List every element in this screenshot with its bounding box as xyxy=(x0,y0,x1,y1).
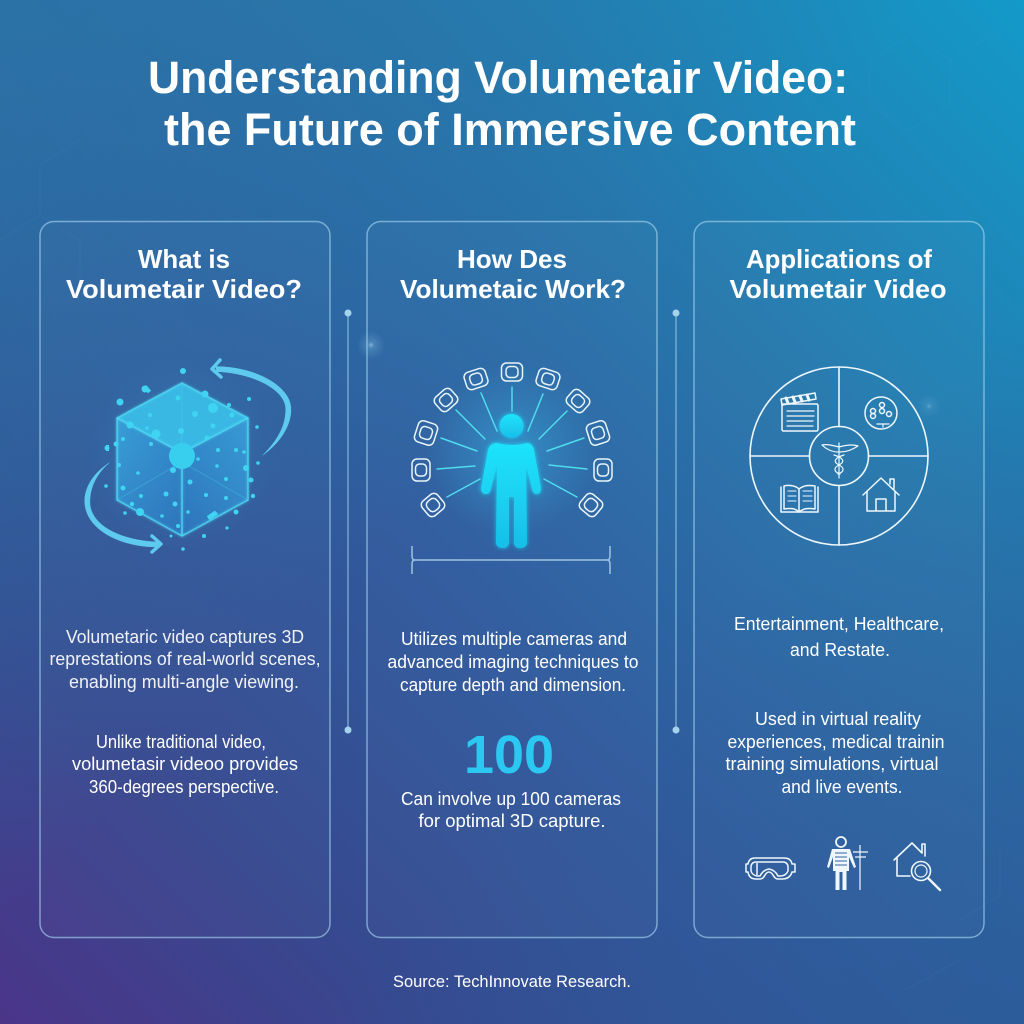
icon: vr headset xyxy=(746,858,795,879)
heading: what is xyxy=(66,244,302,304)
cameras xyxy=(412,363,612,519)
text: uses xyxy=(726,709,944,797)
figure xyxy=(481,414,541,548)
text: how it works: Utilizes multiple cameras and xyxy=(401,629,627,649)
text: how it works: advanced imaging techniques to xyxy=(388,652,638,672)
entertainment group xyxy=(865,397,897,429)
text: comparison: 360-degrees perspective. xyxy=(89,777,279,797)
connector: right xyxy=(672,310,680,734)
arrow: lower rotation arc xyxy=(85,463,161,552)
text: stat caption xyxy=(401,789,621,831)
panel: applications xyxy=(694,222,984,938)
text: definition: represtations of real-world scenes, xyxy=(50,649,320,669)
icon: house with magnifier xyxy=(894,843,940,890)
text: how it works xyxy=(388,629,638,695)
icon: rotating particle cube xyxy=(85,360,291,552)
house xyxy=(863,478,899,511)
heading: applications: Volumetair Video xyxy=(730,274,946,304)
text: sectors xyxy=(734,614,944,660)
text: definition xyxy=(50,627,320,692)
text: stat caption: for optimal 3D capture. xyxy=(418,811,606,831)
text: uses: and live events. xyxy=(782,777,902,797)
text: comparison: volumetasir videoo provides xyxy=(72,754,298,774)
heading: how does: Volumetaic Work? xyxy=(400,274,626,304)
open book xyxy=(781,485,818,512)
heading: what is: Volumetair Video? xyxy=(66,274,302,304)
heading: how does xyxy=(400,244,626,304)
icon: medical figure with iv stand xyxy=(827,837,868,890)
text: sectors: Entertainment, Healthcare, xyxy=(734,614,944,634)
text: uses: training simulations, virtual xyxy=(726,754,938,774)
clapperboard xyxy=(781,393,818,431)
arrow: upper rotation arc xyxy=(212,360,291,455)
heading: applications: Applications of xyxy=(746,244,932,274)
panel: what is volumetric video xyxy=(40,222,330,938)
heading: applications xyxy=(730,244,946,304)
text: stat caption: Can involve up 100 cameras xyxy=(401,789,621,809)
caduceus xyxy=(822,443,858,478)
title: Understanding Volumetair Video: xyxy=(148,52,848,103)
capture-area bracket xyxy=(412,546,610,574)
stat: 100: 100 xyxy=(464,725,554,785)
title: the Future of Immersive Content xyxy=(164,104,856,155)
title xyxy=(148,52,856,155)
icon: application wheel xyxy=(750,367,928,545)
text: comparison: Unlike traditional video, xyxy=(96,732,266,752)
text: definition: Volumetaric video captures 3D xyxy=(66,627,304,647)
connector: left xyxy=(344,310,352,734)
text: uses: Used in virtual reality xyxy=(755,709,921,729)
text: comparison xyxy=(72,732,298,797)
text: sectors: and Restate. xyxy=(790,640,890,660)
text: how it works: capture depth and dimension. xyxy=(400,675,626,695)
text: uses: experiences, medical trainin xyxy=(728,732,944,752)
source line: Source: TechInnovate Research. xyxy=(393,973,631,991)
capture rays xyxy=(437,387,587,497)
text: definition: enabling multi-angle viewing. xyxy=(69,672,299,692)
icon: person surrounded by cameras xyxy=(412,363,612,574)
heading: what is: What is xyxy=(138,244,230,274)
panel: how does volumetric work xyxy=(367,222,657,938)
heading: how does: How Des xyxy=(457,244,567,274)
